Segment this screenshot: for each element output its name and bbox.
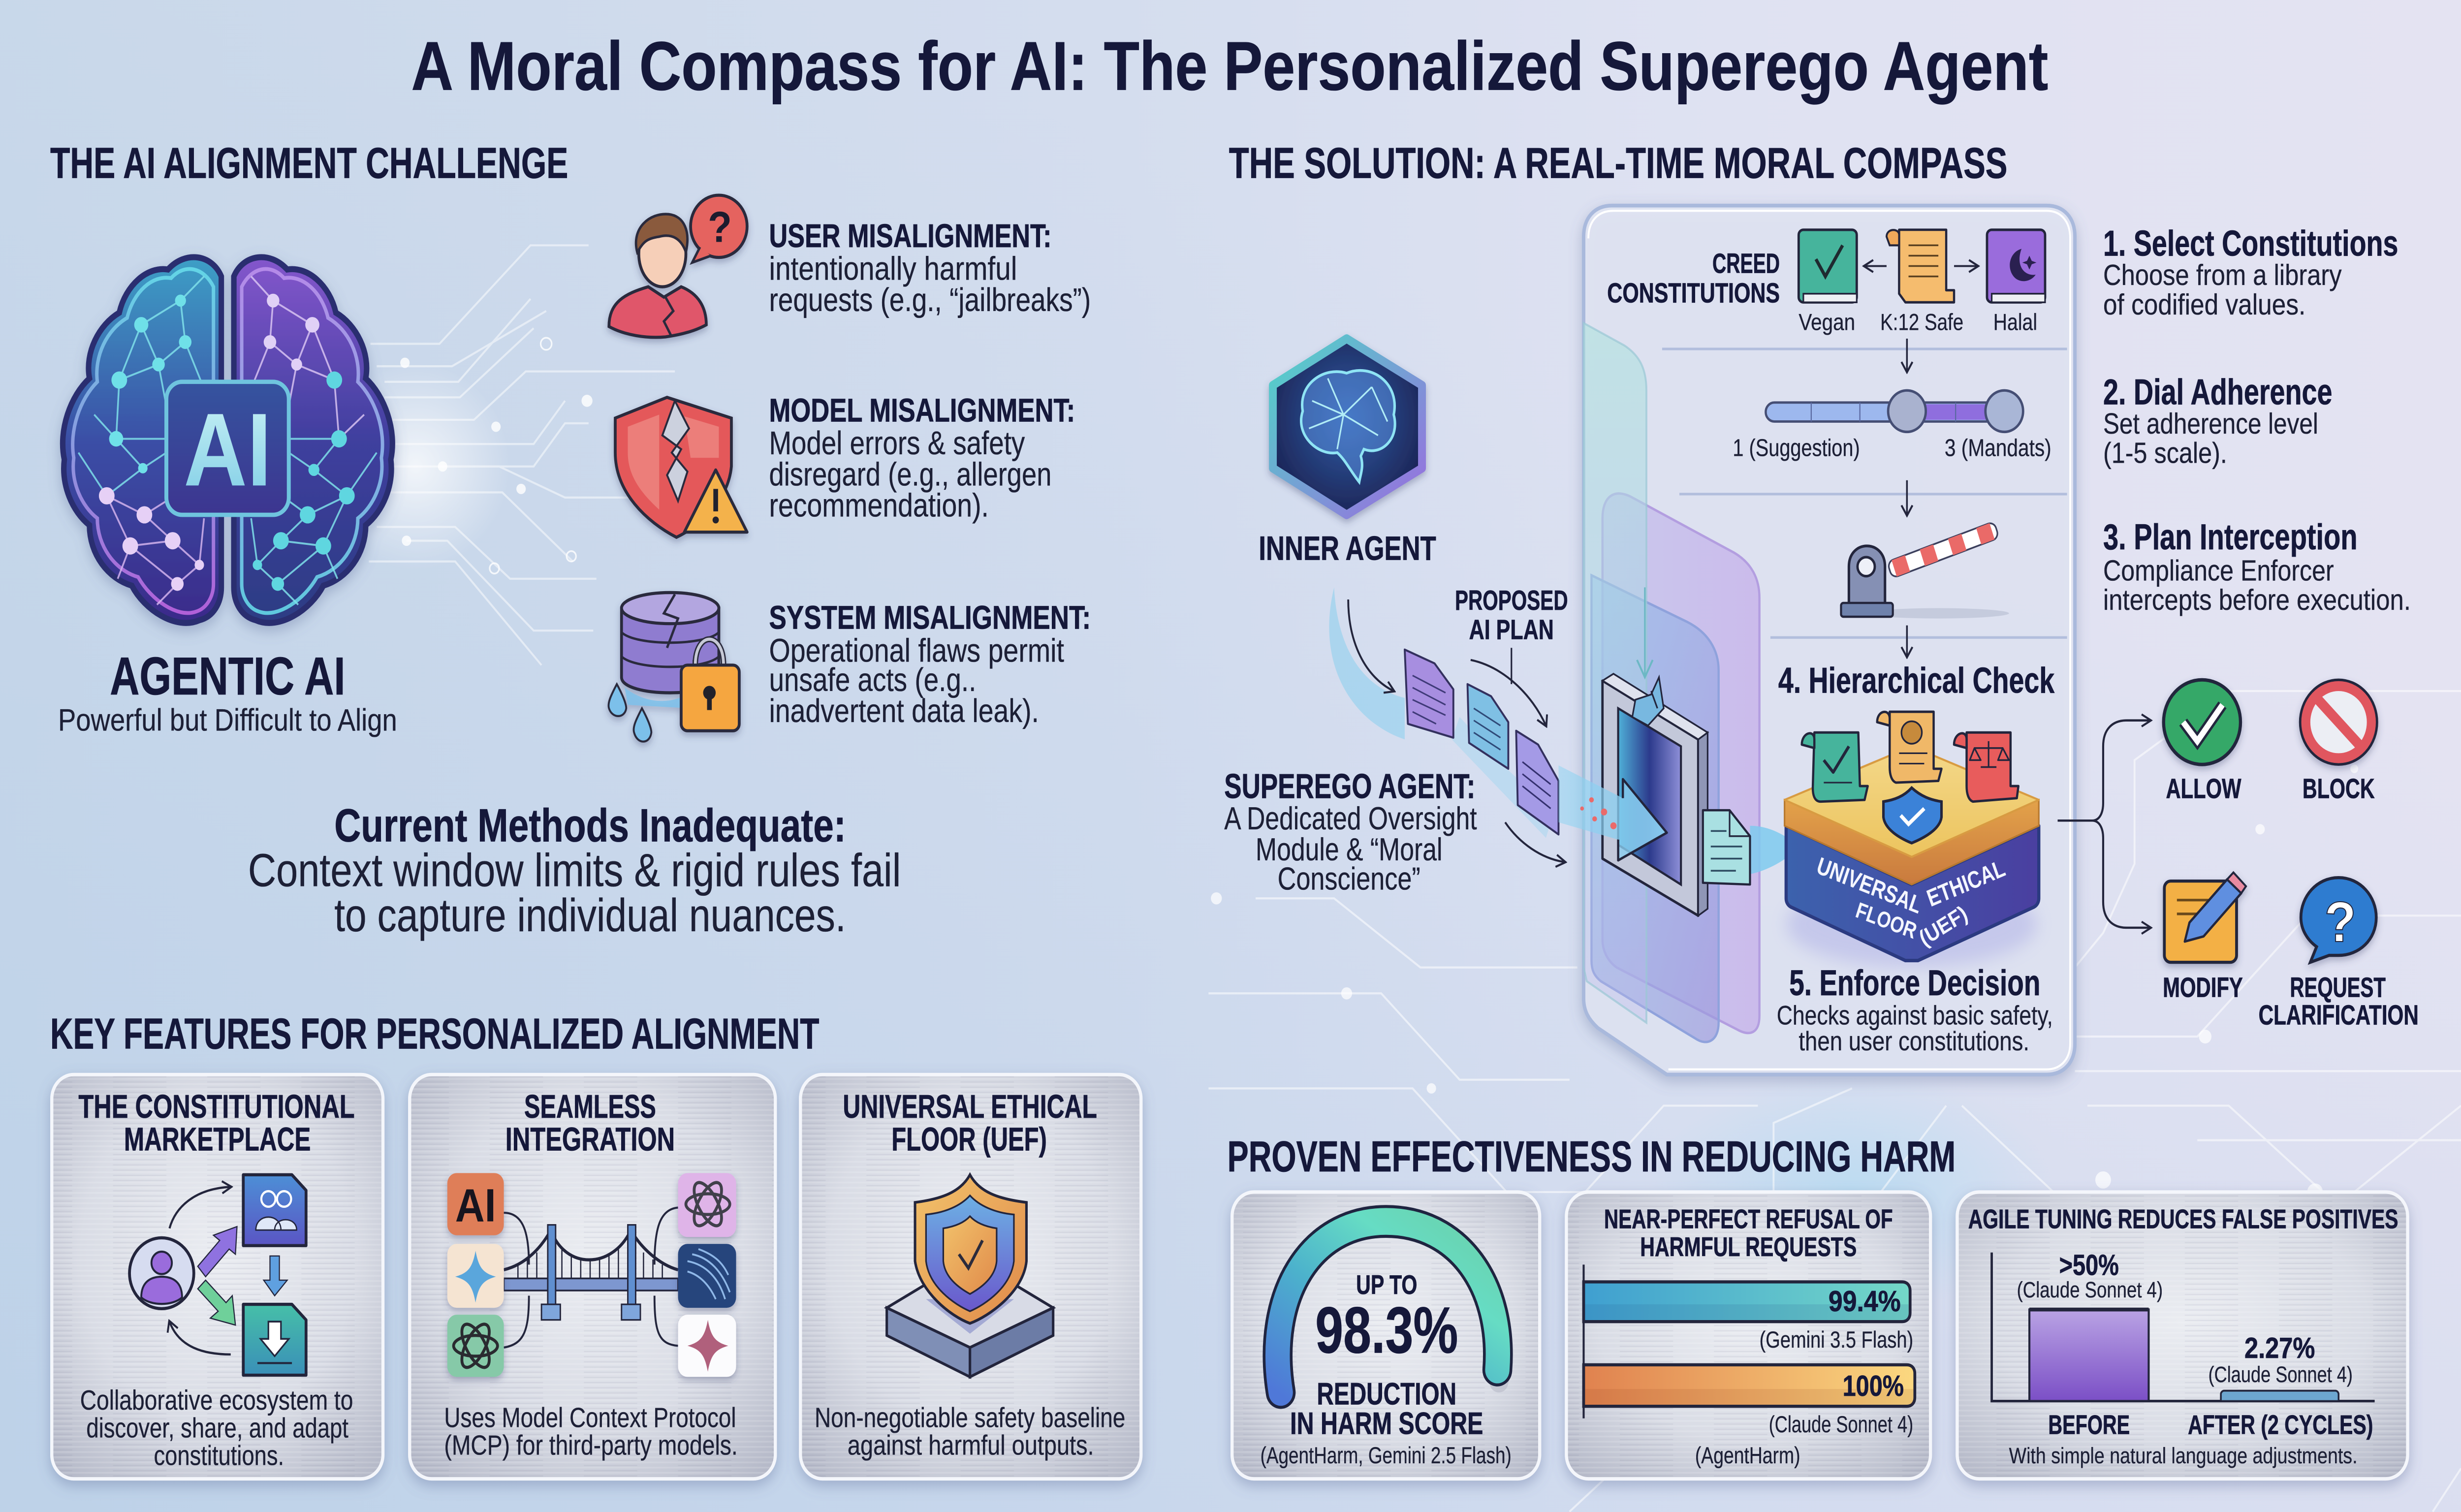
label: request clarification: REQUEST [2290, 972, 2386, 1003]
text: step 3 plan interception: intercepts before execution. [2103, 584, 2411, 617]
card body: discover, share, and adapt [86, 1413, 348, 1444]
creed constitutions label [1607, 248, 1780, 309]
heading: the solution: THE SOLUTION: A REAL-TIME MORAL COMPASS [1229, 139, 2007, 187]
panel: false positives chart [1957, 1192, 2408, 1479]
card heading [843, 1088, 1097, 1158]
icon: red constitution scroll [1954, 732, 2019, 802]
text: superego agent [1224, 767, 1477, 897]
icon: universal ethical floor stack: UNIVERSAL [1814, 852, 1925, 918]
icon: compliance gateway [1603, 674, 1707, 915]
icon: bridge with model tiles: AI [455, 1180, 496, 1232]
text: step 5 enforce decision: 5. Enforce Decision [1789, 962, 2040, 1003]
card heading: THE CONSTITUTIONAL [78, 1088, 355, 1125]
heading: step 4 hierarchical check: 4. Hierarchical Check [1778, 660, 2055, 700]
card heading: UNIVERSAL ETHICAL [843, 1088, 1097, 1125]
constitution labels: K:12 Safe [1880, 309, 1963, 335]
icon: halal book [1987, 230, 2045, 302]
text: step 3 plan interception: 3. Plan Interception [2103, 516, 2358, 557]
gauge value: REDUCTION [1317, 1376, 1456, 1411]
panel: real-time moral compass glass [1583, 206, 2075, 1074]
text: system misalignment: unsafe acts (e.g.. [769, 661, 976, 698]
icon: shield on base [887, 1175, 1053, 1377]
column chart: AFTER (2 CYCLES) [2188, 1410, 2373, 1440]
card heading [505, 1088, 675, 1158]
arrows between constitutions [1864, 266, 1978, 267]
icon: marketplace cycle [129, 1175, 306, 1375]
text: step 2 dial adherence [2103, 371, 2333, 470]
text: system misalignment [769, 599, 1091, 729]
icon: universal ethical floor stack: FLOOR [1853, 898, 1920, 944]
text: step 5 enforce decision: Checks against basic safety, [1777, 1001, 2053, 1031]
text: step 5 enforce decision: then user constitutions. [1798, 1027, 2029, 1057]
panel: the constitutional marketplace [52, 1074, 383, 1479]
card body: against harmful outputs. [848, 1430, 1094, 1461]
panel: refusal bar chart [1566, 1192, 1930, 1479]
heading: proven effectiveness: PROVEN EFFECTIVENESS IN REDUCING HARM [1228, 1132, 1956, 1181]
label: modify: MODIFY [2163, 972, 2243, 1003]
card body: Uses Model Context Protocol [444, 1402, 736, 1433]
bar chart: (AgentHarm) [1695, 1442, 1800, 1468]
adherence slider: 3 (Mandats) [1945, 435, 2051, 461]
heading: the AI alignment challenge: THE AI ALIGNMENT CHALLENGE [50, 139, 568, 187]
card body [815, 1402, 1125, 1461]
icon: modify [2164, 873, 2246, 962]
icon: AI brain [63, 257, 392, 623]
icon: model misalignment [615, 397, 747, 537]
label: request clarification: CLARIFICATION [2259, 1000, 2419, 1031]
text: superego agent: A Dedicated Oversight [1224, 801, 1477, 836]
card heading: HARMFUL REQUESTS [1640, 1232, 1857, 1262]
text: step 3 plan interception: Compliance Enforcer [2103, 554, 2334, 587]
card heading: NEAR-PERFECT REFUSAL OF [1604, 1204, 1893, 1234]
icon: universal ethical floor stack: (UEF) [1915, 901, 1971, 951]
card body [80, 1385, 353, 1471]
agentic AI caption [58, 647, 397, 737]
adherence slider: 1 (Suggestion) [1733, 435, 1860, 461]
icon: universal ethical floor stack [1785, 712, 2039, 968]
icon: user misalignment [609, 195, 747, 337]
card heading: SEAMLESS [524, 1088, 656, 1125]
icon: request clarification: ? [2325, 890, 2356, 954]
bar chart: (Claude Sonnet 4) [1769, 1411, 1913, 1437]
creed constitutions label: CREED [1712, 248, 1780, 279]
title: A Moral Compass for AI: The Personalized Superego Agent [411, 28, 2048, 105]
text: user misalignment [769, 217, 1091, 318]
card body: constitutions. [154, 1440, 284, 1471]
column chart: BEFORE [2048, 1410, 2130, 1440]
callout: current methods inadequate: Context window limits & rigid rules fail [248, 845, 901, 897]
card body: (MCP) for third-party models. [444, 1430, 738, 1461]
text: superego agent: Module & “Moral [1256, 832, 1442, 868]
icon: blue shield [1884, 788, 1942, 843]
layered glass slabs [1583, 323, 1760, 1042]
callout: current methods inadequate: Current Methods Inadequate: [334, 800, 846, 851]
icon: allow [2164, 680, 2240, 764]
card body: Non-negotiable safety baseline [815, 1402, 1125, 1433]
text: superego agent: SUPEREGO AGENT: [1224, 767, 1475, 806]
text: system misalignment: SYSTEM MISALIGNMENT: [769, 599, 1091, 636]
step arrows [1906, 339, 1907, 657]
bar chart: 100% [1843, 1370, 1904, 1403]
card heading: INTEGRATION [505, 1121, 675, 1158]
text: step 3 plan interception [2103, 516, 2411, 617]
text: step 2 dial adherence: 2. Dial Adherence [2103, 371, 2333, 412]
gauge [1278, 1222, 1503, 1392]
card heading: FLOOR (UEF) [891, 1121, 1047, 1158]
icon: gold constitution scroll [1877, 712, 1942, 783]
column chart: (Claude Sonnet 4) [2209, 1362, 2353, 1387]
text: user misalignment: intentionally harmful [769, 250, 1017, 287]
text: model misalignment: Model errors & safety [769, 424, 1025, 462]
bar chart: 99.4% [1829, 1285, 1901, 1318]
gauge value: (AgentHarm, Gemini 2.5 Flash) [1261, 1442, 1512, 1468]
icon: bridge with model tiles [447, 1173, 736, 1377]
column chart: With simple natural language adjustments. [2009, 1444, 2358, 1468]
text: model misalignment [769, 392, 1075, 524]
text: step 2 dial adherence: Set adherence level [2103, 408, 2318, 441]
icon: inner agent hexagon [1273, 339, 1422, 515]
icon: K-12 scroll [1887, 230, 1954, 302]
agentic AI caption: Powerful but Difficult to Align [58, 702, 397, 737]
text: model misalignment: recommendation). [769, 487, 989, 524]
text: superego agent: Conscience” [1278, 861, 1420, 897]
gauge value [1261, 1270, 1512, 1468]
card body [444, 1402, 738, 1461]
icon: document 2 [1468, 684, 1508, 769]
constitution labels [1798, 309, 2037, 335]
label: inner agent: INNER AGENT [1259, 529, 1436, 567]
agentic AI caption: AGENTIC AI [110, 647, 346, 706]
arrow: plan entering gateway [1558, 765, 1667, 860]
bracket arrows to decisions [2057, 721, 2150, 928]
panel: harm score gauge [1232, 1192, 1540, 1479]
label: proposed AI plan: AI PLAN [1469, 614, 1554, 645]
icon: document 1 [1405, 650, 1453, 738]
label: proposed AI plan: PROPOSED [1455, 585, 1568, 616]
text: system misalignment: inadvertent data leak). [769, 692, 1039, 729]
text: step 1 select constitutions: Choose from a library [2103, 259, 2342, 292]
text: system misalignment: Operational flaws permit [769, 632, 1064, 669]
gauge value: UP TO [1356, 1270, 1417, 1300]
panel: seamless integration [410, 1074, 775, 1479]
circuit connectors from brain [322, 245, 675, 665]
column chart: 2.27% [2244, 1332, 2315, 1365]
column chart [1992, 1249, 2375, 1468]
icon: AI brain: AI [184, 392, 272, 507]
text: step 1 select constitutions: 1. Select Constitutions [2103, 222, 2398, 263]
text: step 2 dial adherence: (1-5 scale). [2103, 437, 2227, 470]
gauge value: 98.3% [1315, 1294, 1458, 1367]
text: step 5 enforce decision [1777, 962, 2053, 1057]
text: model misalignment: disregard (e.g., allergen [769, 456, 1051, 493]
callout: current methods inadequate: to capture individual nuances. [334, 889, 846, 942]
icon: user misalignment: ? [708, 203, 732, 251]
creed constitutions label: CONSTITUTIONS [1607, 278, 1780, 309]
constitution labels: Vegan [1798, 309, 1855, 335]
icon: output document with beam [1703, 810, 1800, 884]
label: allow: ALLOW [2166, 773, 2241, 804]
icon: request clarification [2301, 878, 2376, 962]
label: block: BLOCK [2303, 773, 2375, 804]
label: request clarification [2259, 972, 2419, 1031]
icon: barrier gate [1841, 521, 2009, 619]
card heading [78, 1088, 355, 1158]
card heading [1604, 1204, 1893, 1262]
column chart: >50% [2059, 1249, 2119, 1282]
icon: system misalignment [608, 593, 739, 742]
callout: current methods inadequate [248, 800, 901, 942]
adherence slider [1733, 390, 2051, 461]
icon: green constitution scroll [1802, 732, 1868, 802]
icon: vegan book [1798, 230, 1857, 302]
bar chart: (Gemini 3.5 Flash) [1760, 1326, 1913, 1353]
label: proposed AI plan [1455, 585, 1568, 645]
heading: key features: KEY FEATURES FOR PERSONALIZED ALIGNMENT [50, 1009, 820, 1058]
bar chart [1583, 1264, 1915, 1468]
text: user misalignment: USER MISALIGNMENT: [769, 217, 1051, 254]
flow: documents and arrows [1329, 587, 1565, 862]
gauge value: IN HARM SCORE [1290, 1406, 1483, 1441]
icon: document 3 [1516, 731, 1558, 834]
column chart: (Claude Sonnet 4) [2017, 1278, 2163, 1303]
text: step 1 select constitutions: of codified values. [2103, 288, 2305, 321]
icon: block [2300, 680, 2377, 764]
text: step 1 select constitutions [2103, 222, 2398, 321]
panel: universal ethical floor [800, 1074, 1141, 1479]
constitution labels: Halal [1993, 309, 2037, 335]
icon: universal ethical floor stack: ETHICAL [1924, 854, 2008, 912]
card body: Collaborative ecosystem to [80, 1385, 353, 1416]
text: model misalignment: MODEL MISALIGNMENT: [769, 392, 1075, 429]
card heading: MARKETPLACE [124, 1121, 311, 1158]
text: user misalignment: requests (e.g., “jailbreaks”) [769, 281, 1091, 318]
